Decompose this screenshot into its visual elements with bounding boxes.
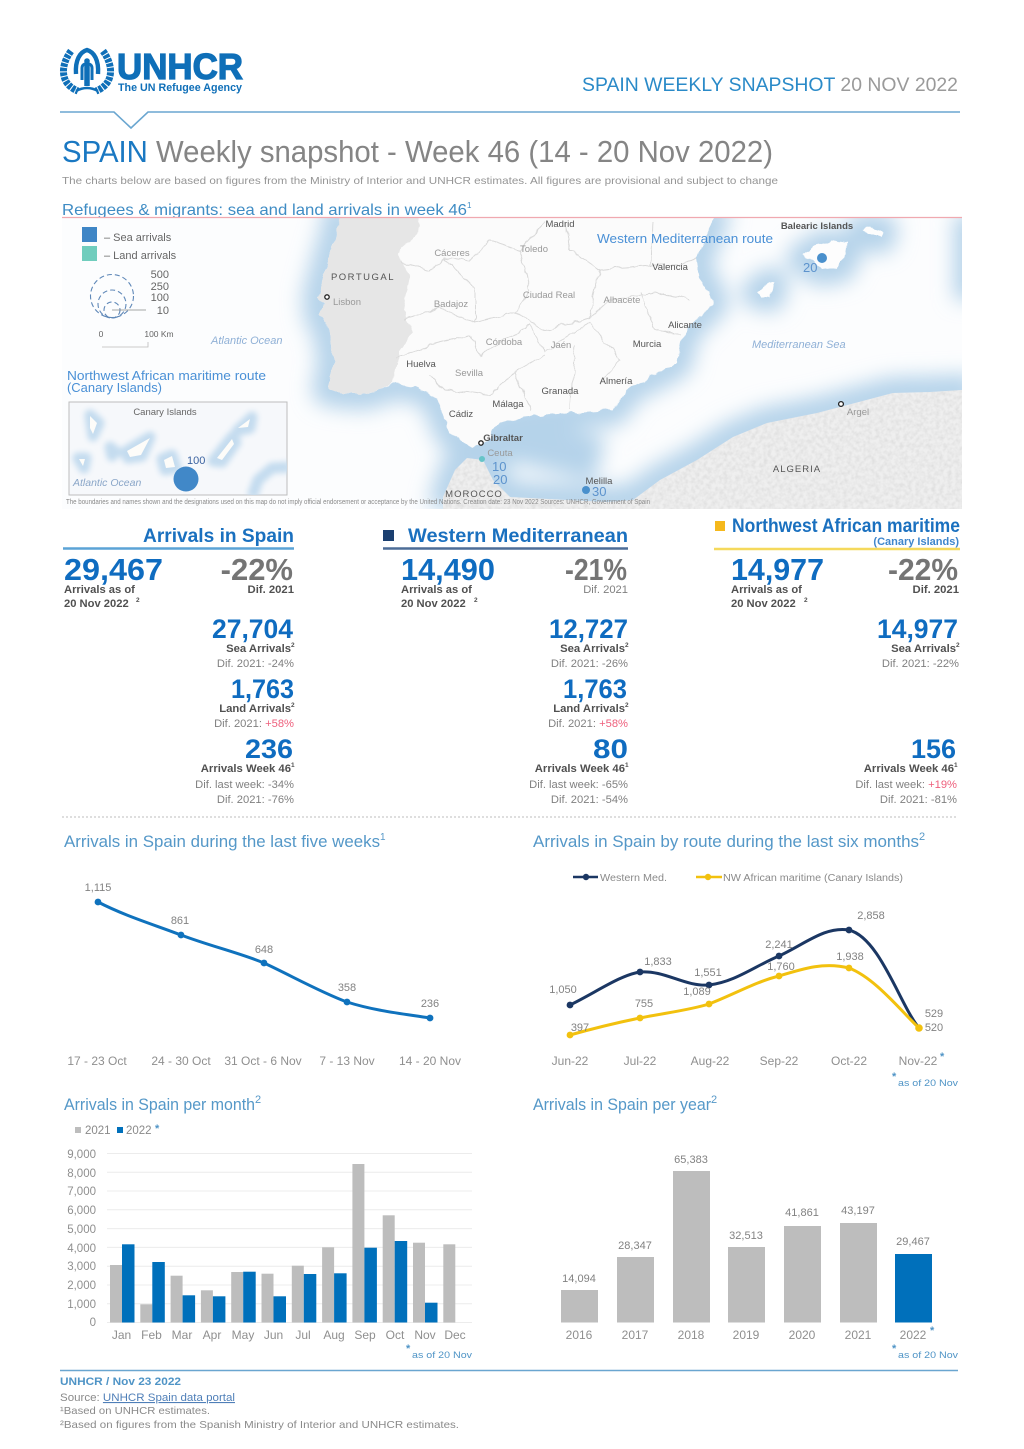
panel: Arrivals in Spain: Arrivals as of [64,584,135,596]
data labels: 14,094 [562,1273,596,1285]
heading: Arrivals in Spain [143,526,294,547]
data labels: 2,241 [765,939,793,951]
heading: five weeks: Arrivals in Spain during the last five weeks [64,833,380,851]
data labels: 65,383 [674,1154,708,1166]
map labels: Madrid [545,219,575,230]
x axis: May [232,1328,254,1342]
header rule with notch [60,112,960,128]
inset map: Canary Islands: 100 [187,455,205,467]
y axis: 0 [90,1317,96,1329]
x axis: Jun [264,1328,283,1342]
series: 2022 [122,1241,438,1322]
data labels: 29,467 [896,1236,930,1248]
x axis: Jan [112,1328,131,1342]
x axis [112,1328,466,1342]
land: Balearic Islands [757,226,882,299]
panel: Northwest African maritime: Dif. 2021: -81% [880,794,957,806]
x axis: Oct [386,1328,405,1342]
y axis: 9,000 [67,1149,96,1161]
line chart: last five weeks: 236 [421,998,439,1010]
x axis: Jul [295,1328,311,1342]
note: * [892,1343,897,1355]
legend: NW African maritime (Canary Islands) [723,873,903,884]
heading: per month: 2 [255,1094,261,1106]
land arrivals: 1,763 [231,674,294,704]
y axis: 1,000 [67,1299,96,1311]
line chart: last five weeks: 14 - 20 Nov [399,1054,461,1068]
map legend: 500 [151,269,169,281]
legend: * [155,1123,160,1135]
x axis: Jun-22 [552,1054,589,1068]
map legend: 100 [151,292,169,304]
panel: map: Mediterranean Sea [752,339,846,351]
total: 14,977 [731,552,824,587]
icon: UNHCR emblem [63,50,111,91]
series: NW African [567,965,923,1038]
x axis: Sep-22 [760,1054,799,1068]
map top rule [62,216,962,218]
inset map: Canary Islands [69,402,290,497]
x axis: 2017 [622,1328,649,1342]
x axis: Oct-22 [831,1054,867,1068]
heading: Northwest African maritime [732,516,960,537]
panel: Northwest African maritime: Dif. last week: +19% [855,779,957,791]
data labels: 2,858 [857,910,885,922]
y axis: 8,000 [67,1168,96,1180]
line chart: last five weeks: 861 [171,915,189,927]
panel: Northwest African maritime: Arrivals as of [731,584,802,596]
x axis: Aug-22 [691,1054,730,1068]
heading: six months: 2 [919,831,925,843]
x axis: Apr [203,1328,221,1342]
map labels: Granada [542,386,579,397]
map legend: 0 [99,329,104,339]
panel: Western Mediterranean: Land Arrivals [553,703,625,715]
map labels: Ceuta [487,448,513,459]
x axis: 2016 [566,1328,593,1342]
heading: five weeks: 1 [380,832,386,843]
land: Portugal [318,212,420,394]
inset map: Canary Islands: Canary Islands [133,407,197,418]
data labels: 397 [571,1022,589,1034]
map labels: Balearic Islands [781,221,853,232]
data labels [549,910,943,1034]
x axis: * [940,1051,945,1063]
series: 2021 [110,1164,455,1322]
header label: SPAIN WEEKLY SNAPSHOT 20 NOV 2022 [582,75,958,96]
panel: Northwest African maritime: (Canary Islands) [873,536,959,548]
footer [60,1376,459,1431]
panel: Western Mediterranean: Sea Arrivals [560,643,625,655]
map legend [82,227,177,347]
footer rule [60,1370,958,1372]
y axis: 3,000 [67,1261,96,1273]
series: Western Med [567,927,919,1028]
note: * [892,1071,897,1083]
panel: Northwest African maritime: Arrivals Week 46 [864,763,954,775]
panel: Northwest African maritime: Dif. 2021: -22% [882,658,959,670]
map disclaimer: The boundaries and names shown and the designations used on this map do not imply official endorsement or acceptance by the United Nations. Creation date: 23 Nov 2022 Sources: UNHCR, Government of Spain [66,499,650,506]
map labels: Murcia [633,339,662,350]
arrival markers: 20 [803,260,817,275]
footer: Source: UNHCR Spain data portal [60,1392,235,1404]
data labels: 520 [925,1022,943,1034]
panel: Arrivals in Spain: Dif. 2021: -24% [217,658,294,670]
tagline: The UN Refugee Agency [118,82,243,94]
map labels: Lisbon [333,297,361,308]
data labels: 529 [925,1008,943,1020]
total: 14,490 [401,552,495,587]
panel: Western Mediterranean: 1 [625,762,629,769]
legend [573,873,903,884]
x axis: 2022 [900,1328,927,1342]
x axis: Jul-22 [624,1054,657,1068]
line chart: last five weeks: 7 - 13 Nov [319,1054,375,1068]
footer: ²Based on figures from the Spanish Ministry of Interior and UNHCR estimates. [60,1419,459,1431]
wordmark: UNHCR [117,46,243,87]
subtitle: The charts below are based on figures from the Ministry of Interior and UNHCR estimates. All figures are provisional and subject to change [62,175,778,187]
province borders [395,222,696,410]
note [892,1343,958,1361]
panel: Western Mediterranean: Dif. 2021: +58% [548,718,628,730]
panel: Western Mediterranean: Arrivals Week 46 [535,763,625,775]
panel: Arrivals in Spain: 1 [291,762,295,769]
heading: six months: Arrivals in Spain by route during the last six months [533,833,919,851]
map labels: Melilla [586,476,613,487]
weekly arrivals: 156 [911,734,956,764]
route label: Northwest African: (Canary Islands) [67,380,162,395]
map labels: Albacete [604,295,640,306]
panel: Western Mediterranean: 20 Nov 2022 [401,598,466,610]
panel: Northwest African maritime [714,516,960,806]
panel: Arrivals in Spain: 2 [136,597,140,604]
icon: navy square [383,530,394,541]
route label: Northwest African: Northwest African maritime route [67,368,266,383]
map labels: PORTUGAL [331,272,395,283]
panel: Arrivals in Spain: Sea Arrivals [226,643,291,655]
map labels: MOROCCO [445,489,503,500]
map heading: Refugees & migrants: sea and land arrivals in week 46 [62,202,467,219]
data labels: 1,833 [644,956,672,968]
map labels: Gibraltar [483,433,523,444]
title: SPAIN Weekly snapshot - Week 46 (14 - 20 Nov 2022) [62,134,773,169]
panel: Northwest African maritime: 2 [804,597,808,604]
map labels: Badajoz [434,299,468,310]
data labels: 43,197 [841,1205,875,1217]
line chart: last five weeks: 17 - 23 Oct [67,1054,127,1068]
panel: Northwest African maritime: Dif. 2021 [913,584,959,596]
map labels: Málaga [492,399,524,410]
land: Spain [318,212,717,448]
note: as of 20 Nov [898,1078,958,1089]
data labels: 28,347 [618,1240,652,1252]
panel: Arrivals in Spain: Dif. 2021: +58% [214,718,294,730]
bar chart: per month [67,1123,472,1361]
x axis: 2020 [789,1328,816,1342]
map labels [331,219,869,500]
heading: Western Mediterranean [408,526,628,547]
x axis: Sep [354,1328,376,1342]
y axis [67,1149,96,1329]
x axis: Mar [172,1328,192,1342]
sea arrivals: 12,727 [549,614,628,644]
arrival markers: 20 [493,472,507,487]
panel: Arrivals in Spain: Dif. 2021 [248,584,294,596]
x axis: 2021 [845,1328,872,1342]
grid [107,1154,472,1322]
map labels: ALGERIA [773,464,821,475]
panel: Western Mediterranean: 2 [625,702,629,709]
note: as of 20 Nov [898,1350,958,1361]
y axis: 6,000 [67,1205,96,1217]
x axis: 2018 [678,1328,705,1342]
note: * [406,1343,411,1355]
panel: Arrivals in Spain [63,526,295,806]
map legend: 100 Km [144,329,174,339]
x axis: Nov-22 [899,1054,938,1068]
panel: Western Mediterranean [383,526,629,806]
panel: Arrivals in Spain: 2 [291,702,295,709]
data labels: 1,760 [767,961,795,973]
arrival markers [325,253,843,499]
panel: map [62,205,975,509]
map legend: 10 [157,305,169,317]
panel: Arrivals in Spain: Arrivals Week 46 [201,763,291,775]
panel: Western Mediterranean: Dif. last week: -65% [529,779,628,791]
panel: Northwest African maritime: 1 [954,762,958,769]
y axis: 7,000 [67,1186,96,1198]
x axis: Nov [414,1328,436,1342]
panel: Western Mediterranean: Dif. 2021: -54% [551,794,628,806]
heading: per month: Arrivals in Spain per month [64,1096,255,1114]
x axis [552,1051,945,1068]
map labels: Cádiz [449,409,473,420]
sea halo [318,205,975,509]
change: -22% [888,552,958,587]
map labels: Toledo [520,244,548,255]
data labels: 1,551 [694,967,722,979]
data labels: 1,938 [836,951,864,963]
y axis: 4,000 [67,1243,96,1255]
x axis [566,1325,935,1342]
map labels: Córdoba [486,337,523,348]
line chart: route, six months [549,873,958,1089]
note: as of 20 Nov [412,1350,472,1361]
data labels: 1,050 [549,984,577,996]
legend [75,1123,160,1137]
map legend: – Sea arrivals [104,232,172,244]
legend: Western Med. [600,873,667,884]
heading: per year: 2 [711,1094,717,1106]
line chart: last five weeks: 31 Oct - 6 Nov [224,1054,302,1068]
panel: Western Mediterranean: Dif. 2021: -26% [551,658,628,670]
x axis: Feb [141,1328,162,1342]
weekly arrivals: 236 [245,734,293,764]
arrival markers: 10 [492,459,506,474]
panel: Northwest African maritime: Sea Arrivals [891,643,956,655]
change: -21% [565,552,627,587]
y axis: 2,000 [67,1280,96,1292]
logo: UNHCR [63,46,243,94]
panel: Arrivals in Spain: Land Arrivals [219,703,291,715]
map labels: Cáceres [434,248,470,259]
map heading: 1 [467,201,472,210]
heading: per year: Arrivals in Spain per year [533,1096,711,1114]
map labels: Jaén [551,340,571,351]
map labels: Alicante [668,320,702,331]
map labels: Huelva [406,359,436,370]
data labels: 41,861 [785,1207,819,1219]
x axis: Dec [444,1328,466,1342]
map labels: Ciudad Real [523,290,575,301]
footer: UNHCR / Nov 23 2022 [60,1376,181,1388]
data labels: 32,513 [729,1230,763,1242]
legend: 2021 [85,1125,111,1137]
line chart: last five weeks [67,882,461,1068]
land: Africa [443,390,962,509]
change: -22% [221,552,293,587]
map labels: Valencia [652,262,689,273]
panel: Arrivals in Spain: Dif. 2021: -76% [217,794,294,806]
panel: Arrivals in Spain: 2 [291,642,295,649]
bar chart: per year [561,1154,958,1361]
note [892,1071,958,1089]
map labels: Almería [600,376,633,387]
ocean labels: Atlantic Ocean [210,335,283,347]
panel: Arrivals in Spain: 20 Nov 2022 [64,598,129,610]
panel: Western Mediterranean: Arrivals as of [401,584,472,596]
x axis: Aug [323,1328,345,1342]
panel: Northwest African maritime: 2 [956,642,960,649]
line chart: last five weeks: 648 [255,944,273,956]
sea arrivals: 14,977 [877,614,958,644]
data labels [562,1154,930,1285]
line chart: last five weeks: 358 [338,982,356,994]
line chart: last five weeks: 1,115 [85,882,111,894]
map legend: – Land arrivals [104,250,177,262]
x axis: * [930,1325,935,1337]
panel: Western Mediterranean: 2 [474,597,478,604]
data labels: 1,089 [683,986,711,998]
land arrivals: 1,763 [563,674,627,704]
inset map: Canary Islands: Atlantic Ocean [72,477,141,489]
route label: Northwest African [67,368,266,395]
arrival markers: 30 [592,484,606,499]
line chart: last five weeks: 24 - 30 Oct [151,1054,211,1068]
legend: 2022 [126,1125,152,1137]
weekly arrivals: 80 [593,734,628,764]
panel: Western Mediterranean: 2 [625,642,629,649]
note [406,1343,472,1361]
route label: Western Mediterranean: Western Mediterranean route [597,231,773,246]
data labels: 755 [635,998,653,1010]
map legend: 250 [151,281,169,293]
panel: Arrivals in Spain: Dif. last week: -34% [195,779,294,791]
panel: Western Mediterranean: Dif. 2021 [583,584,628,596]
footer: ¹Based on UNHCR estimates. [60,1405,210,1417]
map labels: Argel [847,407,869,418]
panel: Northwest African maritime: 20 Nov 2022 [731,598,796,610]
total: 29,467 [64,552,163,587]
y axis: 5,000 [67,1224,96,1236]
x axis: 2019 [733,1328,760,1342]
sea arrivals: 27,704 [212,614,293,644]
map labels: Sevilla [455,368,484,379]
icon: yellow square [715,521,725,531]
